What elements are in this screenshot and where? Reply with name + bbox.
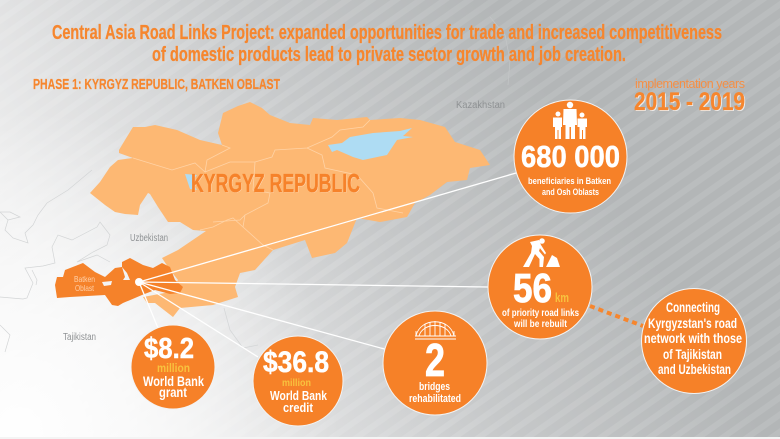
origin node <box>135 278 143 286</box>
implementation years: 2015 - 2019 <box>635 89 746 117</box>
map label: Kyrgyz Republic: KYRGYZ REPUBLIC <box>191 168 360 198</box>
implementation years: implementation years <box>635 77 745 91</box>
circle: road links: of priority road links <box>502 307 579 319</box>
connector lines <box>139 173 516 357</box>
circle: connecting: Connecting <box>666 300 720 315</box>
circle: credit: World Bank <box>270 388 328 403</box>
region: main territory <box>90 102 490 317</box>
region: Batken Oblast <box>55 258 183 306</box>
map label: Kyrgyz Republic: KYRGYZ REPUBLIC <box>192 168 361 198</box>
circle: connecting: of Tajikistan <box>663 347 722 362</box>
circle: credit: credit <box>283 400 314 415</box>
circle: credit: $36.8 <box>263 346 329 379</box>
circle: beneficiaries: beneficiaries in Batken <box>528 176 611 187</box>
circle: credit: million <box>282 377 311 389</box>
map label: Kyrgyz Republic <box>191 168 361 198</box>
dotted link <box>590 306 643 326</box>
neighbouring country borders <box>0 17 510 352</box>
phase heading: PHASE 1: KYRGYZ REPUBLIC, BATKEN OBLAST <box>33 77 280 93</box>
circle: bridges: bridges <box>419 381 450 393</box>
circle: grant: grant <box>159 384 187 400</box>
internal oblast borders <box>133 120 403 250</box>
label: Batken Oblast <box>74 274 95 293</box>
circle: beneficiaries: 680 000 <box>521 139 620 174</box>
circle: beneficiaries <box>514 100 627 213</box>
circle: beneficiaries: and Osh Oblasts <box>542 187 599 198</box>
circle: connecting <box>642 288 746 394</box>
country labels: Tajikistan <box>63 332 96 343</box>
circle: bridges <box>383 311 487 415</box>
implementation years: 2015 - 2019 <box>634 88 745 116</box>
circle: connecting: and Uzbekistan <box>658 362 731 377</box>
circle: bridges: 2 <box>425 334 445 386</box>
country labels <box>63 100 505 343</box>
lake: Issyk-Kul <box>328 128 413 160</box>
country labels: Uzbekistan <box>130 233 168 244</box>
title <box>52 22 722 66</box>
circle: bridges: rehabilitated <box>409 393 461 405</box>
circle: road links: 56 <box>513 265 552 311</box>
label: Batken Oblast: Oblast <box>75 283 94 293</box>
circle: credit <box>253 336 343 426</box>
circle: road links: will be rebuilt <box>513 318 567 330</box>
circle: road links: km <box>555 290 569 305</box>
map: Kyrgyz Republic <box>55 102 490 317</box>
implementation years <box>634 77 746 117</box>
icon: family <box>553 102 587 139</box>
circle: grant: $8.2 <box>144 333 194 365</box>
circle: road links <box>488 235 592 339</box>
circle: connecting: network with those <box>644 331 742 346</box>
icon: bridge <box>415 321 456 339</box>
icon: road worker <box>523 238 560 267</box>
circle: grant <box>131 325 215 409</box>
label: Batken Oblast: Batken <box>74 274 95 284</box>
circle: grant: million <box>157 361 190 375</box>
circle: connecting: Kyrgyzstan's road <box>648 316 737 331</box>
reservoir <box>185 174 197 190</box>
country labels: Kazakhstan <box>456 100 505 111</box>
circle: grant: World Bank <box>143 373 204 389</box>
